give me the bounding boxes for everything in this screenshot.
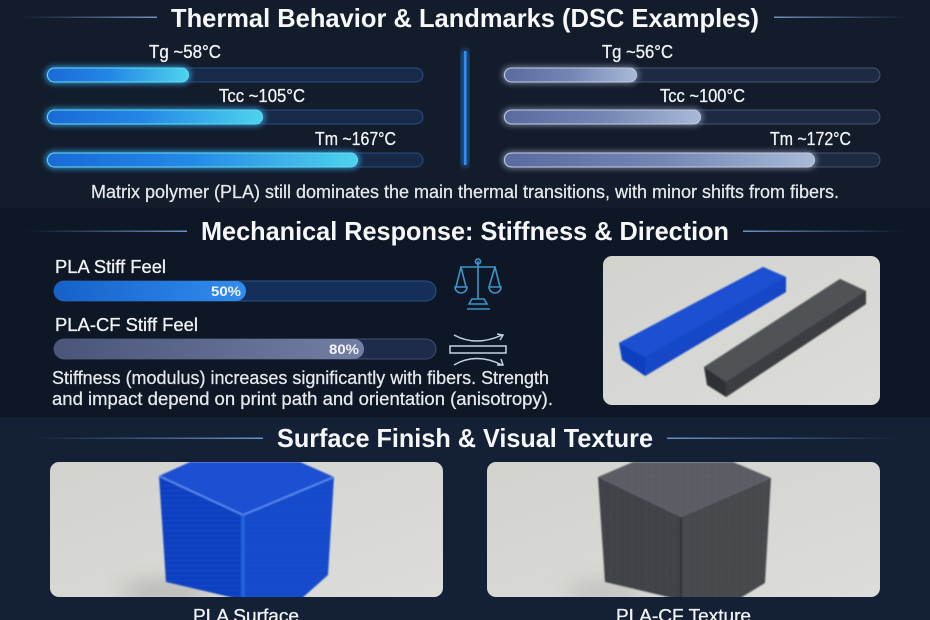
- bar: PLA stiff feel 50%: [54, 257, 436, 301]
- chart: PLA thermal landmarks: Tcc ~105°C: [219, 86, 305, 106]
- icon: balance scale: [455, 259, 501, 309]
- text: stiffness explanation: and impact depend on print path and orientation (anisotropy).: [52, 389, 553, 409]
- panel: surface finish: [30, 423, 900, 620]
- icon: flexing beam with arrows: [450, 334, 506, 365]
- text: thermal summary: Matrix polymer (PLA) still dominates the main thermal transitions, with minor shifts from fibers.: [91, 182, 839, 202]
- bar: PLA stiff feel 50%: 50%: [211, 283, 242, 299]
- panel: mechanical response: [25, 216, 905, 409]
- panel: mechanical response background: [0, 208, 930, 417]
- photo: printed test bars: [603, 256, 880, 405]
- photo: PLA cube surface: [50, 462, 443, 602]
- text: stiffness explanation: Stiffness (modulus) increases significantly with fibers. Strength: [52, 368, 549, 388]
- photo: PLA-CF cube texture: [487, 462, 880, 602]
- chart: PLA-CF thermal landmarks: Tcc ~100°C: [660, 86, 745, 106]
- panel: surface finish background: [0, 417, 930, 620]
- heading: surface finish: Surface Finish & Visual Texture: [277, 423, 653, 453]
- chart: PLA-CF thermal landmarks: Tg ~56°C: [602, 42, 673, 62]
- bar: PLA-CF stiff feel 80%: PLA-CF Stiff Feel: [55, 315, 198, 335]
- bar: PLA-CF stiff feel 80%: 80%: [329, 341, 360, 357]
- heading: mechanical response: Mechanical Response: Stiffness & Direction: [201, 216, 729, 246]
- chart: PLA thermal landmarks: [45, 42, 423, 169]
- panel: thermal behavior: [20, 3, 910, 202]
- bar: PLA stiff feel 50%: PLA Stiff Feel: [55, 257, 166, 277]
- heading: thermal behavior: Thermal Behavior & Landmarks (DSC Examples): [171, 3, 759, 33]
- chart: PLA thermal landmarks: Tg ~58°C: [149, 42, 221, 62]
- chart: PLA thermal landmarks: Tm ~167°C: [315, 129, 396, 149]
- panel: thermal behavior background: [0, 0, 930, 208]
- text: stiffness explanation: [52, 368, 553, 409]
- divider: glowing vertical bar: [461, 50, 469, 166]
- chart: PLA-CF thermal landmarks: Tm ~172°C: [770, 129, 851, 149]
- bar: PLA-CF stiff feel 80%: [54, 315, 436, 359]
- chart: PLA-CF thermal landmarks: [502, 42, 880, 169]
